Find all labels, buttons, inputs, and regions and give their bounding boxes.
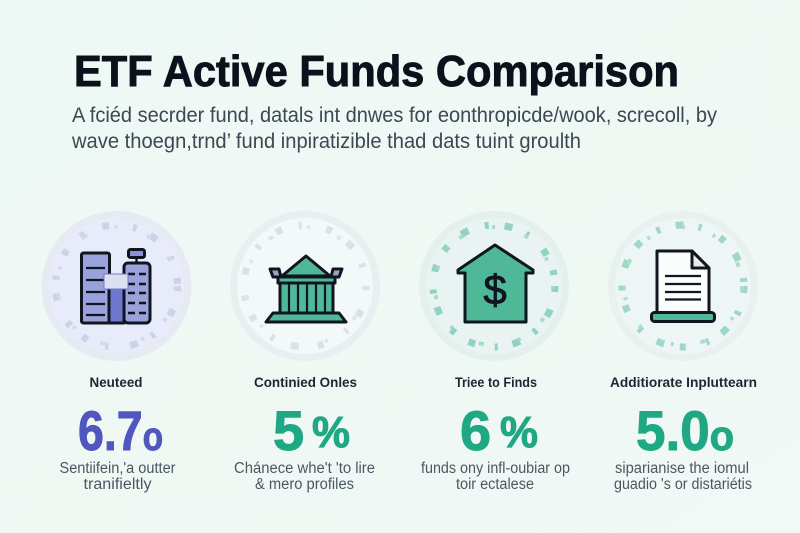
description: toir ectalese xyxy=(456,476,534,493)
value: % xyxy=(500,408,538,457)
description: guadio 's or distariétis xyxy=(614,476,752,493)
value: 5.0o xyxy=(636,399,734,462)
description xyxy=(60,460,176,493)
title: ETF Active Funds Comparison xyxy=(74,47,679,96)
value: 6.7o xyxy=(78,399,163,462)
description: Chánece whe't 'to lire xyxy=(234,460,375,477)
label: Neuteed xyxy=(90,375,142,390)
panel: Triee to Finds xyxy=(419,211,570,493)
icon: office buildings in fragment ring xyxy=(42,211,192,361)
description: funds ony infl-oubiar op xyxy=(421,460,570,477)
label: Additiorate Inpluttearn xyxy=(610,375,757,390)
panel: Neuteed xyxy=(42,211,192,493)
panel: Additiorate Inpluttearn xyxy=(608,211,758,493)
icon: house with dollar sign in fragment ring xyxy=(419,211,569,361)
value: % xyxy=(312,408,350,457)
icon: house with dollar sign in fragment ring: $ xyxy=(483,266,507,313)
description xyxy=(614,460,752,493)
value xyxy=(460,399,538,462)
description xyxy=(234,460,375,493)
subtitle: A fciéd secrder fund, datals int dnwes for eonthropicde/wook, screcoll, by xyxy=(72,104,717,127)
value: 5 xyxy=(273,399,304,462)
label: Triee to Finds xyxy=(455,375,537,390)
description: siparianise the iomul xyxy=(615,460,749,477)
panel: Continied Onles xyxy=(230,211,380,493)
value: 6 xyxy=(460,399,491,462)
description: Sentiifein,'a outter xyxy=(60,460,176,477)
icon: bank building in fragment ring xyxy=(230,211,380,361)
label: Continied Onles xyxy=(254,375,357,390)
icon: document in fragment ring xyxy=(608,211,758,361)
subtitle: wave thoegn,trnd’ fund inpiratizible thad dats tuint groulth xyxy=(71,130,581,153)
description xyxy=(421,460,570,493)
value xyxy=(273,399,350,462)
description: & mero profiles xyxy=(255,476,354,493)
description: tranifieltly xyxy=(84,476,152,493)
subtitle xyxy=(71,104,717,153)
